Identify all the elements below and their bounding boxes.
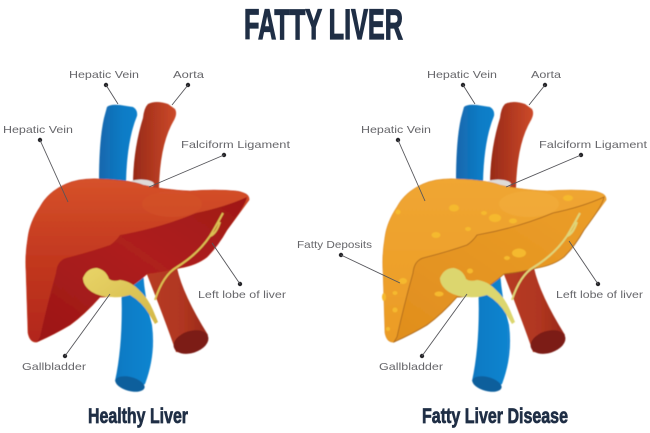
callout: hepatic vein top: Hepatic Vein bbox=[427, 69, 497, 81]
callout: fatty deposits: Fatty Deposits bbox=[297, 239, 372, 251]
callout: falciform ligament bbox=[506, 139, 647, 187]
aorta vessel bbox=[133, 102, 176, 188]
callout: gallbladder bbox=[379, 294, 467, 373]
liver highlight bbox=[142, 191, 202, 217]
liver underside bbox=[37, 197, 247, 342]
callout: falciform ligament: Falciform Ligament bbox=[539, 139, 647, 151]
callout: hepatic vein left bbox=[361, 124, 431, 201]
callout: fatty deposits bbox=[297, 239, 400, 283]
callout: hepatic vein top bbox=[69, 69, 139, 104]
callout: gallbladder: Gallbladder bbox=[379, 361, 444, 373]
callout: left lobe of liver: Left lobe of liver bbox=[198, 289, 287, 301]
vein opening bbox=[471, 373, 503, 395]
falciform ligament bbox=[485, 180, 511, 188]
callout: left lobe of liver bbox=[556, 241, 644, 301]
gallbladder and bile duct bbox=[440, 268, 515, 324]
callout: left lobe of liver: Left lobe of liver bbox=[556, 289, 644, 301]
panel: fatty liver disease bbox=[297, 69, 647, 428]
aorta opening bbox=[170, 326, 212, 358]
falciform ligament bbox=[128, 180, 154, 188]
callout: falciform ligament bbox=[149, 139, 290, 187]
liver body bbox=[26, 179, 249, 342]
callout: falciform ligament: Falciform Ligament bbox=[181, 139, 290, 151]
heading: healthy liver: Healthy Liver bbox=[88, 405, 188, 428]
aorta vessel bbox=[490, 102, 533, 188]
liver underside bbox=[394, 197, 604, 342]
callout: left lobe of liver bbox=[198, 243, 287, 301]
title: FATTY LIVER bbox=[244, 1, 403, 49]
callout: aorta bbox=[172, 69, 204, 105]
illustration: fatty liver with vessels bbox=[382, 102, 606, 395]
liver body bbox=[383, 179, 606, 342]
aorta opening bbox=[527, 326, 569, 358]
fatty deposits bbox=[382, 195, 573, 331]
hepatic vein vessel bbox=[99, 105, 153, 388]
callout: aorta: Aorta bbox=[173, 69, 204, 81]
callout: aorta bbox=[529, 69, 561, 105]
heading: fatty liver disease: Fatty Liver Disease bbox=[422, 405, 568, 428]
gallbladder and bile duct bbox=[83, 268, 158, 324]
callout: hepatic vein left: Hepatic Vein bbox=[361, 124, 431, 136]
callout: hepatic vein top bbox=[427, 69, 497, 104]
hepatic vein vessel bbox=[456, 105, 510, 388]
callout: hepatic vein left bbox=[3, 124, 73, 202]
callout: aorta: Aorta bbox=[531, 69, 561, 81]
callout: gallbladder: Gallbladder bbox=[22, 361, 87, 373]
callout: hepatic vein top: Hepatic Vein bbox=[69, 69, 139, 81]
callout: hepatic vein left: Hepatic Vein bbox=[3, 124, 73, 136]
panel: healthy liver bbox=[3, 69, 290, 428]
callout: gallbladder bbox=[22, 294, 110, 373]
illustration: healthy liver with vessels bbox=[26, 102, 249, 395]
vein opening bbox=[114, 373, 146, 395]
liver highlight bbox=[499, 191, 559, 217]
